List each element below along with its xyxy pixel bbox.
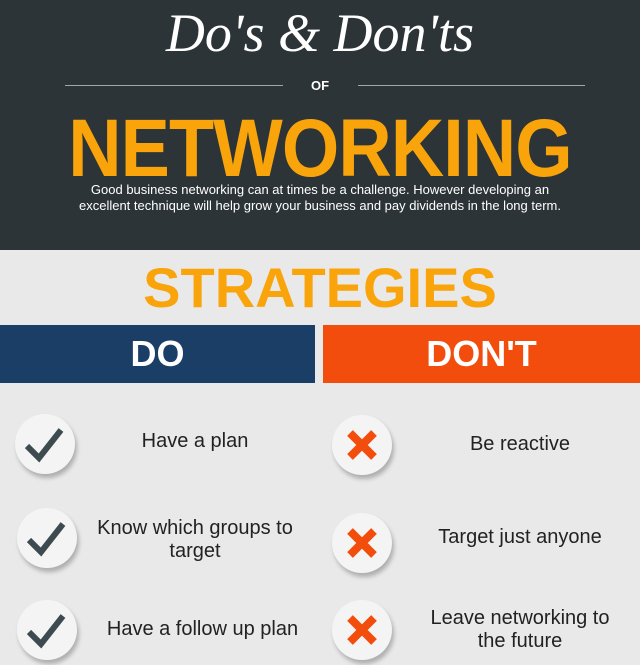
STRATEGIES heading: STRATEGIES (143, 256, 497, 319)
DON'T bar: DON'T (426, 333, 537, 374)
DON'T bar (323, 325, 640, 383)
icon: x 2 (332, 513, 392, 573)
icon: check 1 (15, 414, 75, 474)
DO bar (0, 325, 315, 383)
text: anyone: Target just anyone (438, 526, 602, 548)
divider with OF: OF (311, 78, 329, 93)
dont list (332, 415, 610, 665)
NETWORKING heading: NETWORKING (68, 103, 572, 194)
script title: Do's & Don'ts (166, 3, 474, 63)
text: have a plan: Have a plan (142, 430, 248, 452)
do list (14, 414, 298, 665)
icon: check 3 (17, 600, 77, 660)
DO bar: DO (130, 333, 184, 374)
icon: x 3 (332, 600, 392, 660)
text: future: Leave networking to the future (430, 607, 610, 652)
icon: x 1 (332, 415, 392, 475)
intro text: Good business networking can at times be a challenge. However developing an excellent technique will help grow your business and pay dividends in the long term. (79, 182, 561, 213)
icon: check 2 (17, 508, 77, 568)
text: reactive: Be reactive (470, 433, 570, 455)
header panel (0, 0, 640, 250)
text: follow up: Have a follow up plan (107, 618, 298, 640)
text: groups: Know which groups to target (97, 517, 293, 562)
